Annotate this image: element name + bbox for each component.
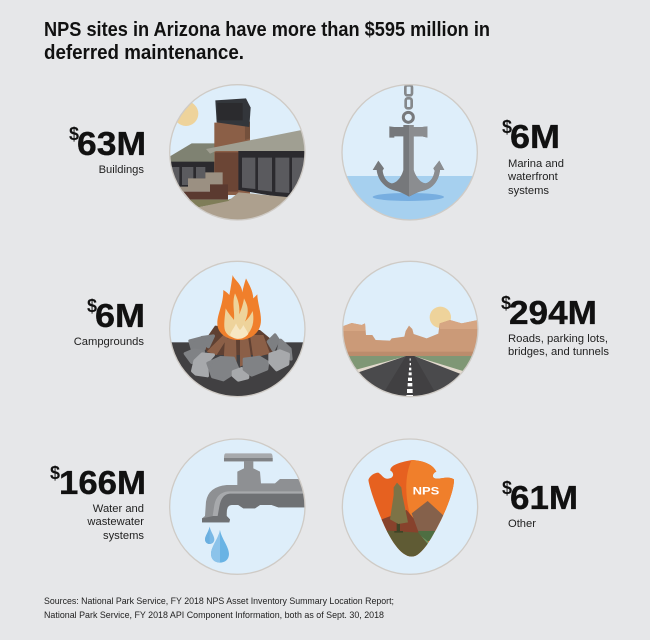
stat: buildings: [69, 124, 146, 176]
sources: Sources: National Park Service, FY 2018 NPS Asset Inventory Summary Location Report;: [44, 596, 394, 607]
icon: campfire: [167, 258, 310, 402]
stat: water: wastewater: [86, 516, 144, 528]
stat: roads: 294M: [509, 294, 597, 331]
icon: buildings: [167, 82, 310, 225]
icon: NPS arrowhead: [340, 437, 480, 580]
stat: water: $: [50, 463, 60, 483]
icon: anchor: [340, 82, 480, 225]
stat: marina: Marina and: [508, 158, 564, 170]
stat: other: Other: [508, 518, 536, 530]
stat: other: $: [502, 478, 512, 498]
icon: road: [342, 258, 482, 402]
stat: roads: [501, 293, 609, 358]
stat: marina: 6M: [510, 118, 560, 155]
stat: buildings: $: [69, 124, 79, 144]
stat: water: systems: [103, 530, 144, 542]
stat: roads: Roads, parking lots,: [508, 333, 608, 345]
stat: water: [50, 463, 146, 542]
stat: other: 61M: [510, 479, 578, 516]
stat: marina: systems: [508, 185, 549, 197]
title: [44, 19, 490, 64]
stat: campgrounds: 6M: [95, 297, 145, 334]
stat: campgrounds: Campgrounds: [74, 336, 144, 348]
stat: buildings: Buildings: [99, 164, 144, 176]
sources: National Park Service, FY 2018 API Component Information, both as of Sept. 30, 2018: [44, 610, 384, 621]
stat: other: [502, 478, 578, 530]
sources: [44, 596, 394, 621]
stat: water: Water and: [93, 503, 144, 515]
title: deferred maintenance.: [44, 42, 244, 64]
stat: marina: $: [502, 117, 512, 137]
icon: faucet: [167, 437, 310, 580]
stat: marina: [502, 117, 564, 197]
icon: NPS arrowhead: NPS: [413, 486, 439, 498]
stat: roads: bridges, and tunnels: [508, 346, 609, 358]
stat: campgrounds: [74, 296, 145, 348]
stat: roads: $: [501, 293, 511, 313]
stat: water: 166M: [59, 464, 146, 501]
stat: campgrounds: $: [87, 296, 97, 316]
stat: marina: waterfront: [507, 171, 559, 183]
stat: buildings: 63M: [77, 125, 146, 162]
title: NPS sites in Arizona have more than $595 million in: [44, 19, 490, 41]
